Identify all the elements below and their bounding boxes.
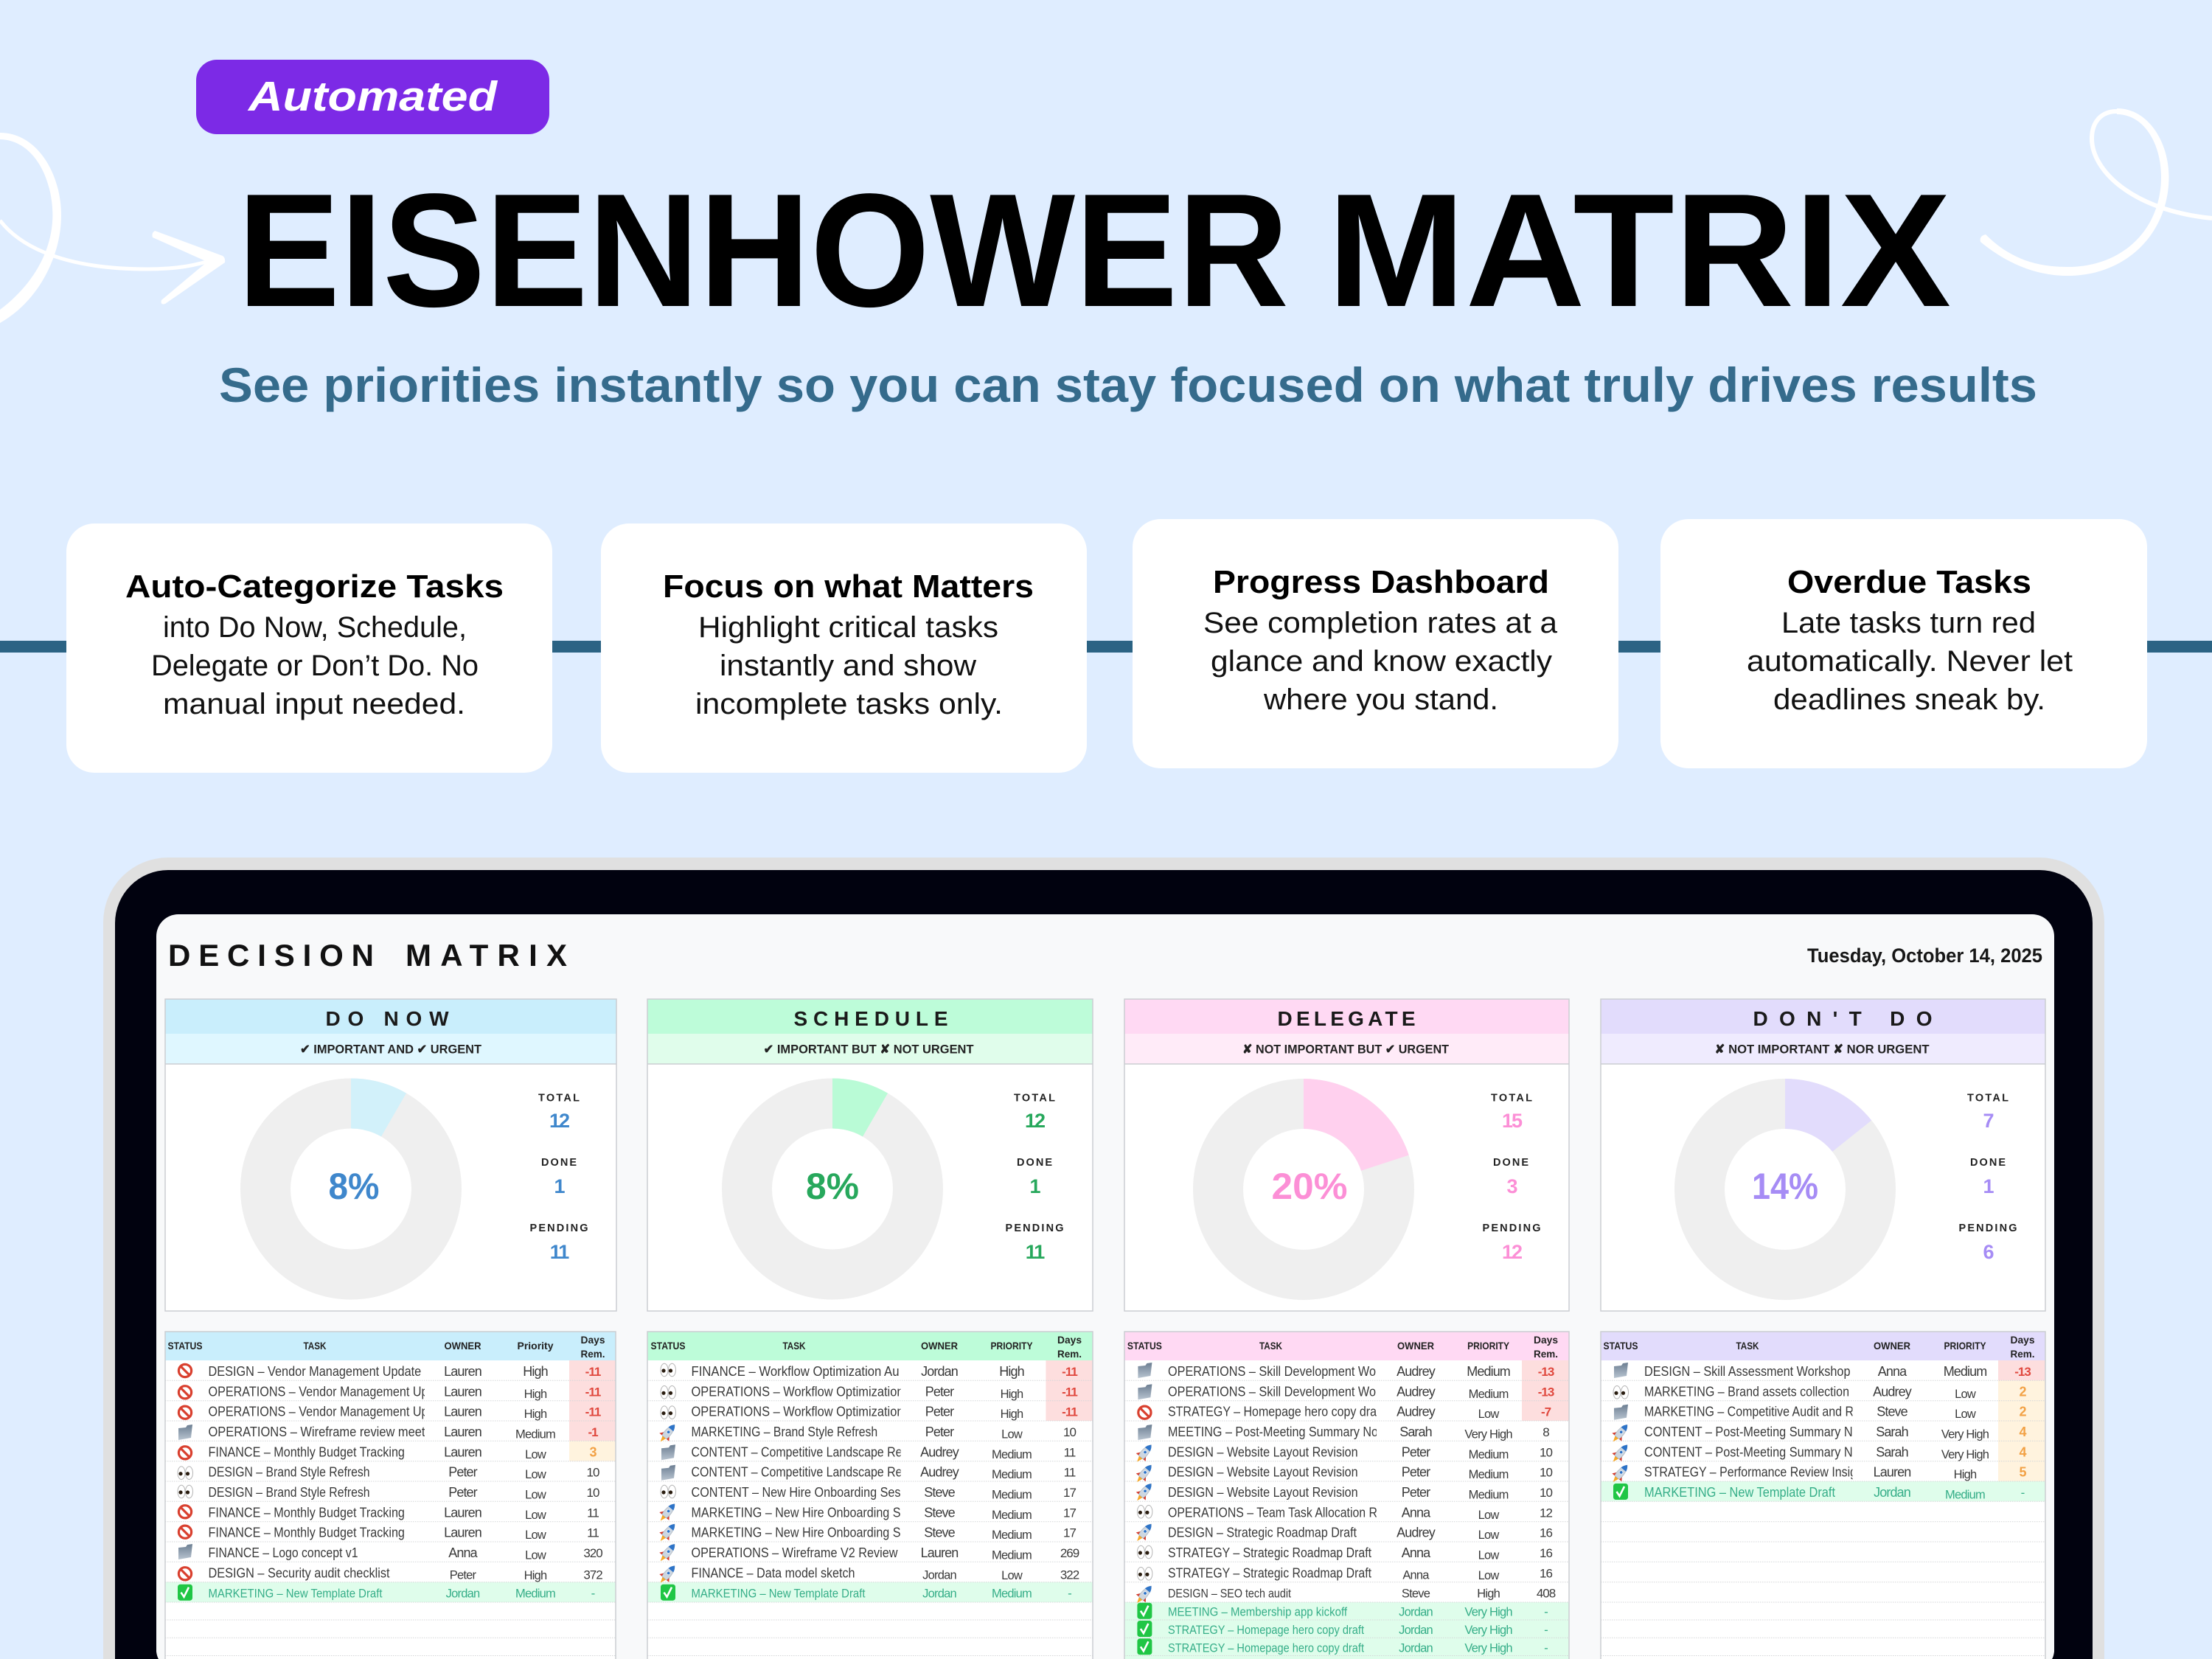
table: Don't Do tasks: Sarah (1876, 1425, 1908, 1439)
table: Do Now tasks: DESIGN – Vendor Management Update (208, 1364, 421, 1379)
table header: OWNER (444, 1340, 481, 1352)
donut chart: Do Now 8% (265, 1078, 437, 1274)
dashboard title (168, 938, 567, 973)
table: Delegate tasks: - (1544, 1623, 1548, 1637)
table header: Rem. (581, 1348, 605, 1360)
panel: Do Now summary: ✔ IMPORTANT AND ✔ URGENT (300, 1043, 482, 1056)
stats: Don't Do: PENDING (1958, 1222, 2017, 1234)
table: Don't Do tasks: CONTENT – Post-Meeting Summary N (1644, 1425, 1853, 1439)
card: Focus on what Matters: Focus on what Matters (663, 568, 1034, 605)
table: Schedule tasks: CONTENT – Competitive Landscape Re (692, 1444, 902, 1459)
table: Schedule tasks: 17 (1063, 1486, 1076, 1500)
table: Do Now tasks: -11 (585, 1385, 601, 1399)
table: Do Now tasks: OPERATIONS – Wireframe review meet (208, 1425, 425, 1439)
table: Delegate tasks: STRATEGY – Homepage hero copy dra (1168, 1405, 1377, 1419)
table header: TASK (1736, 1340, 1759, 1352)
table: Schedule tasks: 11 (1064, 1466, 1076, 1480)
table: Delegate tasks: Low (1478, 1528, 1499, 1542)
table: Delegate tasks: DESIGN – Website Layout Revision (1168, 1485, 1358, 1500)
table: Schedule tasks: Medium (992, 1548, 1032, 1562)
table: Don't Do tasks: 2 (2019, 1384, 2026, 1399)
stats: Schedule: DONE (1017, 1157, 1052, 1169)
table: Don't Do tasks: Jordan (1874, 1485, 1910, 1500)
table: Schedule tasks: Medium (992, 1509, 1032, 1522)
table: Delegate tasks: DESIGN – Strategic Roadmap Draft (1168, 1526, 1357, 1540)
table header: Rem. (2010, 1348, 2035, 1360)
table: Schedule tasks: Steve (924, 1526, 956, 1540)
table: Do Now tasks: 3 (589, 1444, 597, 1459)
table: Delegate tasks: Sarah (1399, 1425, 1432, 1439)
table: Do Now tasks: -11 (585, 1405, 601, 1419)
card: Progress Dashboard (1133, 519, 1618, 768)
table: Schedule tasks: FINANCE – Workflow Optimization Au (692, 1364, 900, 1379)
card: Overdue Tasks: deadlines sneak by. (1773, 684, 2045, 716)
badge: Automated: Automated (247, 73, 498, 120)
table: Delegate tasks: Anna (1402, 1545, 1431, 1560)
table: Schedule tasks: Lauren (921, 1545, 958, 1560)
table: Schedule tasks: High (1001, 1408, 1023, 1421)
table: Schedule tasks: Jordan (922, 1568, 956, 1582)
panel: Delegate summary: ✘ NOT IMPORTANT BUT ✔ URGENT (1242, 1043, 1450, 1056)
table: Schedule tasks: Medium (992, 1587, 1032, 1601)
stats: Delegate: PENDING (1482, 1222, 1541, 1234)
table: Don't Do tasks: High (1954, 1468, 1977, 1481)
table: Do Now tasks: FINANCE – Logo concept v1 (208, 1545, 358, 1560)
table: Delegate tasks: -13 (1538, 1365, 1554, 1379)
table: Schedule tasks: 17 (1063, 1526, 1076, 1540)
table: Don't Do tasks: -13 (2014, 1365, 2031, 1379)
table: Delegate tasks: 12 (1540, 1506, 1552, 1520)
card: Auto-Categorize Tasks: manual input needed. (163, 688, 465, 720)
table: Don't Do tasks: Medium (1944, 1364, 1986, 1379)
table: Don't Do tasks: Low (1955, 1388, 1976, 1401)
table: Schedule tasks: Low (1001, 1427, 1023, 1441)
table: Delegate tasks: MEETING – Post-Meeting Summary No (1168, 1425, 1378, 1439)
stats: Don't Do: 1 (1983, 1175, 1994, 1197)
table: Do Now tasks: High (524, 1388, 547, 1401)
table: Schedule tasks: Medium (992, 1528, 1032, 1542)
table: Don't Do tasks: Steve (1877, 1405, 1908, 1419)
table: Schedule tasks: Audrey (920, 1465, 959, 1480)
table header: TASK (783, 1340, 805, 1352)
table: Schedule tasks: OPERATIONS – Workflow Optimization (692, 1384, 904, 1399)
table: Delegate tasks: Audrey (1397, 1364, 1436, 1379)
stats: Delegate: 3 (1506, 1175, 1517, 1197)
stats: Schedule: PENDING (1006, 1222, 1063, 1234)
table: Delegate tasks: - (1544, 1605, 1548, 1619)
table: Do Now tasks: FINANCE – Monthly Budget Tracking (208, 1526, 405, 1540)
table: Don't Do tasks: Sarah (1876, 1444, 1908, 1459)
table: Do Now tasks: -1 (588, 1425, 598, 1439)
donut chart: Don't Do 14% (1700, 1079, 1871, 1275)
table: Do Now tasks: Low (525, 1528, 546, 1542)
stats: Delegate (1482, 1093, 1541, 1263)
table: Delegate tasks: Medium (1469, 1488, 1509, 1501)
stats: Delegate: TOTAL (1491, 1093, 1532, 1105)
table: Delegate tasks: 10 (1540, 1486, 1552, 1500)
table: Delegate tasks: OPERATIONS – Skill Development Wo (1168, 1364, 1376, 1379)
stats: Do Now: 12 (549, 1110, 569, 1132)
table: Delegate tasks: Medium (1469, 1468, 1509, 1481)
table: Delegate tasks: Audrey (1397, 1384, 1436, 1399)
stats: Schedule: TOTAL (1014, 1093, 1055, 1105)
stats: Delegate: 12 (1502, 1241, 1522, 1263)
table: Do Now tasks: Lauren (444, 1364, 481, 1379)
table: Delegate tasks: Anna (1402, 1505, 1431, 1520)
tablet device frame (103, 858, 2104, 1659)
table: Delegate tasks: Peter (1402, 1444, 1430, 1459)
panel: Schedule summary: ✔ IMPORTANT BUT ✘ NOT URGENT (764, 1043, 974, 1056)
table: Delegate tasks: Steve (1402, 1587, 1430, 1601)
table: Do Now tasks: 372 (583, 1568, 602, 1582)
table: Schedule tasks: CONTENT – New Hire Onboarding Ses (692, 1485, 901, 1500)
table: Do Now tasks: 10 (587, 1466, 599, 1480)
table: Delegate tasks: Low (1478, 1569, 1499, 1582)
table: Schedule tasks: MARKETING – Brand Style Refresh (692, 1425, 877, 1439)
table: Schedule tasks: Low (1001, 1569, 1023, 1582)
stats: Do Now: DONE (541, 1157, 577, 1169)
stats: Delegate: DONE (1493, 1157, 1528, 1169)
table: Do Now tasks: FINANCE – Monthly Budget Tracking (208, 1444, 405, 1459)
table: Don't Do tasks: - (2021, 1486, 2025, 1500)
stats: Do Now: 11 (550, 1241, 569, 1263)
title: MATRIX (1327, 161, 1951, 341)
stats: Schedule (1006, 1093, 1063, 1263)
table: Schedule tasks: Jordan (921, 1364, 958, 1379)
table: Delegate tasks: DESIGN – Website Layout Revision (1168, 1444, 1358, 1459)
table header: Priority (518, 1340, 554, 1352)
table: Delegate tasks: Low (1478, 1509, 1499, 1522)
table: Do Now tasks: Lauren (444, 1505, 481, 1520)
table: Schedule tasks: 10 (1063, 1425, 1076, 1439)
table header (1127, 1334, 1558, 1360)
table: Do Now tasks: Low (525, 1468, 546, 1481)
table: Do Now tasks: Peter (448, 1485, 478, 1500)
table: Schedule tasks: -11 (1062, 1365, 1077, 1379)
table: Don't Do tasks: Very High (1941, 1448, 1989, 1461)
table: Do Now tasks: 11 (587, 1506, 599, 1520)
card: Progress Dashboard: See completion rates at a (1203, 607, 1558, 639)
table: Delegate tasks: -7 (1541, 1405, 1551, 1419)
table: Do Now tasks: High (524, 1408, 547, 1421)
table: Do Now tasks: Medium (515, 1587, 555, 1601)
table: Delegate tasks: 10 (1540, 1466, 1552, 1480)
table header: OWNER (1397, 1340, 1434, 1352)
table header: Days (1057, 1334, 1082, 1346)
table: Delegate tasks: 16 (1540, 1526, 1552, 1540)
donut chart: Don't Do 14%: 14% (1752, 1166, 1818, 1207)
table: Delegate tasks: DESIGN – SEO tech audit (1168, 1587, 1291, 1601)
table: Schedule tasks: Steve (924, 1505, 956, 1520)
table: Schedule tasks: OPERATIONS – Workflow Optimization (692, 1405, 904, 1419)
donut chart: Schedule 8% (747, 1078, 918, 1274)
table: Don't Do tasks: 4 (2019, 1425, 2026, 1439)
table header (1603, 1334, 2035, 1360)
table: Don't Do tasks: Low (1955, 1408, 1976, 1421)
table: Delegate tasks: Low (1478, 1408, 1499, 1421)
table header: STATUS (650, 1340, 686, 1352)
table header: OWNER (1874, 1340, 1910, 1352)
table: Schedule tasks: Medium (992, 1448, 1032, 1461)
table: Delegate tasks: Jordan (1399, 1624, 1433, 1637)
table: Do Now tasks: OPERATIONS – Vendor Management Up (208, 1405, 428, 1419)
table: Do Now tasks: Anna (448, 1545, 479, 1560)
table header: Days (1534, 1334, 1558, 1346)
stats: Do Now: 1 (554, 1175, 565, 1197)
decorative swirl: top right (1980, 108, 2212, 276)
card: Overdue Tasks (1660, 519, 2147, 768)
table: Delegate tasks: - (1544, 1641, 1548, 1655)
table: Schedule tasks: High (999, 1364, 1024, 1379)
table: Do Now tasks: High (523, 1364, 548, 1379)
table: Delegate tasks: Low (1478, 1548, 1499, 1562)
dashboard title: MATRIX (406, 938, 567, 973)
table: Do Now tasks: - (591, 1587, 595, 1601)
title (237, 161, 1951, 341)
stats: Don't Do: DONE (1970, 1157, 2006, 1169)
dashboard title: DECISION (168, 938, 374, 973)
table: Schedule tasks: Peter (925, 1425, 954, 1439)
table: Delegate tasks: Audrey (1397, 1526, 1436, 1540)
table: Schedule tasks: Medium (992, 1468, 1032, 1481)
table: Do Now tasks: High (524, 1569, 547, 1582)
table: Delegate tasks: Medium (1467, 1364, 1510, 1379)
table: Don't Do tasks: CONTENT – Post-Meeting Summary N (1644, 1444, 1853, 1459)
table: Do Now tasks (165, 1332, 616, 1659)
stats: Do Now (529, 1093, 588, 1263)
table: Delegate tasks: Peter (1402, 1465, 1430, 1480)
table header: OWNER (921, 1340, 958, 1352)
table: Do Now tasks: 10 (587, 1486, 599, 1500)
donut chart: Do Now 8%: 8% (329, 1166, 379, 1207)
table: Schedule tasks: 17 (1063, 1506, 1076, 1520)
card: Overdue Tasks: automatically. Never let (1747, 645, 2073, 678)
table: Do Now tasks: 320 (583, 1546, 602, 1560)
table: Schedule tasks: 269 (1060, 1546, 1079, 1560)
table: Delegate tasks: DESIGN – Website Layout Revision (1168, 1465, 1358, 1480)
table: Do Now tasks: -11 (585, 1365, 601, 1379)
stats: Don't Do: 6 (1983, 1241, 1994, 1263)
table header: TASK (1259, 1340, 1282, 1352)
table: Don't Do tasks: 5 (2019, 1465, 2026, 1480)
table: Delegate tasks: 16 (1540, 1566, 1552, 1580)
stats: Don't Do (1958, 1093, 2017, 1263)
table: Delegate tasks: 10 (1540, 1445, 1552, 1459)
table: Delegate tasks: High (1477, 1587, 1500, 1601)
stats: Don't Do: TOTAL (1967, 1093, 2008, 1105)
table: Schedule tasks: OPERATIONS – Wireframe V2 Review (692, 1545, 898, 1560)
table: Delegate tasks: Very High (1464, 1641, 1512, 1655)
table: Schedule tasks: Jordan (922, 1587, 956, 1601)
table header: PRIORITY (1944, 1340, 1986, 1352)
table: Schedule tasks: -11 (1062, 1385, 1077, 1399)
table: Delegate tasks: Medium (1469, 1448, 1509, 1461)
table: Delegate tasks: Very High (1464, 1606, 1512, 1619)
table: Do Now tasks: Low (525, 1509, 546, 1522)
table: Delegate tasks: OPERATIONS – Team Task Allocation R (1168, 1505, 1377, 1520)
table: Delegate tasks: STRATEGY – Homepage hero copy draft (1168, 1641, 1364, 1655)
table: Delegate tasks: 8 (1543, 1425, 1549, 1439)
table header: Days (2010, 1334, 2035, 1346)
table header (168, 1334, 605, 1360)
table: Do Now tasks: FINANCE – Monthly Budget Tracking (208, 1505, 405, 1520)
table header: PRIORITY (991, 1340, 1033, 1352)
table header: STATUS (1127, 1340, 1162, 1352)
table: Do Now tasks: Peter (448, 1465, 478, 1480)
table: Delegate tasks: Very High (1464, 1624, 1512, 1637)
table: Schedule tasks: FINANCE – Data model sketch (692, 1565, 855, 1580)
card: Auto-Categorize Tasks: Delegate or Don’t Do. No (151, 650, 479, 682)
table: Do Now tasks: Lauren (444, 1444, 481, 1459)
subtitle: See priorities instantly so you can stay focused on what truly drives results (219, 358, 2037, 412)
table: Do Now tasks: Medium (515, 1427, 555, 1441)
table: Don't Do tasks: MARKETING – Competitive Audit and R (1644, 1405, 1854, 1419)
donut chart: Delegate 20%: 20% (1271, 1166, 1348, 1207)
table: Don't Do tasks: Audrey (1873, 1384, 1912, 1399)
table: Schedule tasks: MARKETING – New Hire Onboarding S (692, 1526, 901, 1540)
table: Schedule tasks: High (1001, 1388, 1023, 1401)
table: Delegate tasks (1124, 1332, 1569, 1659)
table: Delegate tasks: 16 (1540, 1546, 1552, 1560)
card: Progress Dashboard: where you stand. (1263, 684, 1498, 716)
table: Don't Do tasks: STRATEGY – Performance Review Insig (1644, 1465, 1857, 1480)
table: Delegate tasks: Very High (1464, 1427, 1512, 1441)
table: Do Now tasks: Lauren (444, 1526, 481, 1540)
table header: TASK (304, 1340, 326, 1352)
table: Don't Do tasks: Very High (1941, 1427, 1989, 1441)
table: Delegate tasks: Medium (1469, 1388, 1509, 1401)
table: Delegate tasks: MEETING – Membership app kickoff (1168, 1605, 1347, 1619)
table: Schedule tasks: CONTENT – Competitive Landscape Re (692, 1465, 902, 1480)
panel: Don't Do summary: ✘ NOT IMPORTANT ✘ NOR URGENT (1715, 1043, 1930, 1056)
donut chart: Schedule 8%: 8% (806, 1166, 859, 1207)
table: Don't Do tasks (1601, 1332, 2045, 1659)
table header: PRIORITY (1467, 1340, 1510, 1352)
table: Delegate tasks: -13 (1538, 1385, 1554, 1399)
stats: Delegate: 15 (1502, 1110, 1523, 1132)
table: Do Now tasks: 11 (587, 1526, 599, 1540)
table: Schedule tasks: -11 (1062, 1405, 1077, 1419)
table: Don't Do tasks: MARKETING – Brand assets collection (1644, 1384, 1849, 1399)
stats: Schedule: 12 (1025, 1110, 1045, 1132)
table: Do Now tasks: OPERATIONS – Vendor Management Up (208, 1384, 428, 1399)
table: Delegate tasks: Jordan (1399, 1641, 1433, 1655)
table header: STATUS (168, 1340, 202, 1352)
table: Delegate tasks: STRATEGY – Homepage hero copy draft (1168, 1623, 1364, 1637)
panel: Don't Do summary: DON'T DO (1753, 1007, 1932, 1030)
stats: Do Now: PENDING (529, 1222, 588, 1234)
table: Do Now tasks: Lauren (444, 1425, 481, 1439)
table: Delegate tasks: Audrey (1397, 1405, 1436, 1419)
panel: Schedule summary (647, 999, 1093, 1311)
table header: STATUS (1603, 1340, 1638, 1352)
card: Auto-Categorize Tasks (66, 524, 552, 773)
table: Don't Do tasks: Anna (1878, 1364, 1907, 1379)
panel: Do Now summary (165, 999, 616, 1311)
table: Don't Do tasks: 2 (2019, 1405, 2026, 1419)
card: Auto-Categorize Tasks: Auto-Categorize Tasks (125, 568, 504, 605)
table: Delegate tasks: Jordan (1399, 1606, 1433, 1619)
table: Don't Do tasks: Lauren (1874, 1465, 1910, 1480)
table: Do Now tasks: Lauren (444, 1384, 481, 1399)
card: Overdue Tasks: Late tasks turn red (1781, 607, 2036, 639)
date: Tuesday, October 14, 2025 (1807, 945, 2042, 967)
table: Delegate tasks: OPERATIONS – Skill Development Wo (1168, 1384, 1376, 1399)
card: Overdue Tasks: Overdue Tasks (1787, 564, 2031, 600)
table: Schedule tasks: MARKETING – New Template Draft (692, 1587, 866, 1601)
table: Don't Do tasks: 4 (2019, 1444, 2026, 1459)
card: Focus on what Matters: instantly and show (720, 650, 976, 682)
connector bar behind feature cards (0, 641, 2212, 653)
panel: Do Now summary: DO NOW (326, 1007, 449, 1030)
table: Do Now tasks: DESIGN – Security audit checklist (208, 1565, 389, 1580)
table: Do Now tasks: Low (525, 1548, 546, 1562)
table: Do Now tasks: DESIGN – Brand Style Refresh (208, 1485, 370, 1500)
panel: Delegate summary: DELEGATE (1277, 1007, 1416, 1030)
table: Delegate tasks: 408 (1537, 1587, 1556, 1601)
table: Schedule tasks: Audrey (920, 1444, 959, 1459)
stats: Schedule: 1 (1029, 1175, 1040, 1197)
card: Focus on what Matters (601, 524, 1087, 773)
table header: Rem. (1534, 1348, 1558, 1360)
table: Do Now tasks: Peter (450, 1568, 477, 1582)
table: Don't Do tasks: DESIGN – Skill Assessment Workshop (1644, 1364, 1851, 1379)
card: Auto-Categorize Tasks: into Do Now, Schedule, (163, 611, 467, 644)
stats: Schedule: 11 (1026, 1241, 1045, 1263)
table: Schedule tasks: - (1068, 1587, 1071, 1601)
table: Schedule tasks: Steve (924, 1485, 956, 1500)
badge: Automated (196, 60, 549, 134)
card: Focus on what Matters: Highlight critical tasks (698, 611, 998, 644)
stats: Do Now: TOTAL (538, 1093, 580, 1105)
donut chart: Delegate 20% (1218, 1079, 1409, 1275)
table header (650, 1334, 1082, 1360)
table: Delegate tasks: STRATEGY – Strategic Roadmap Draft (1168, 1545, 1371, 1560)
table: Don't Do tasks: Medium (1945, 1488, 1985, 1501)
table header: Days (581, 1334, 605, 1346)
table: Schedule tasks: 11 (1064, 1445, 1076, 1459)
table: Schedule tasks: Peter (925, 1405, 954, 1419)
panel: Schedule summary: SCHEDULE (793, 1007, 948, 1030)
table: Do Now tasks: DESIGN – Brand Style Refresh (208, 1465, 370, 1480)
table: Schedule tasks: Medium (992, 1488, 1032, 1501)
table: Don't Do tasks: MARKETING – New Template Draft (1644, 1485, 1835, 1500)
card: Progress Dashboard: glance and know exactly (1211, 645, 1552, 678)
table: Delegate tasks: Peter (1402, 1485, 1430, 1500)
stats: Don't Do: 7 (1983, 1110, 1993, 1132)
table: Do Now tasks: MARKETING – New Template Draft (208, 1587, 383, 1601)
panel: Don't Do summary (1601, 999, 2045, 1311)
table header: Rem. (1057, 1348, 1082, 1360)
panel: Delegate summary (1124, 999, 1569, 1311)
table: Do Now tasks: Low (525, 1488, 546, 1501)
title: EISENHOWER (237, 161, 1289, 341)
table: Schedule tasks (647, 1332, 1093, 1659)
table: Do Now tasks: Jordan (446, 1587, 480, 1601)
table: Schedule tasks: 322 (1060, 1568, 1079, 1582)
table: Schedule tasks: Peter (925, 1384, 954, 1399)
table: Delegate tasks: STRATEGY – Strategic Roadmap Draft (1168, 1565, 1371, 1580)
table: Delegate tasks: Anna (1402, 1568, 1430, 1582)
table: Schedule tasks: MARKETING – New Hire Onboarding S (692, 1505, 901, 1520)
table: Do Now tasks: Low (525, 1448, 546, 1461)
table: Do Now tasks: Lauren (444, 1405, 481, 1419)
card: Progress Dashboard: Progress Dashboard (1213, 564, 1549, 600)
card: Focus on what Matters: incomplete tasks only. (695, 688, 1003, 720)
decorative arrow: left swirl pointing at the title (0, 133, 225, 323)
